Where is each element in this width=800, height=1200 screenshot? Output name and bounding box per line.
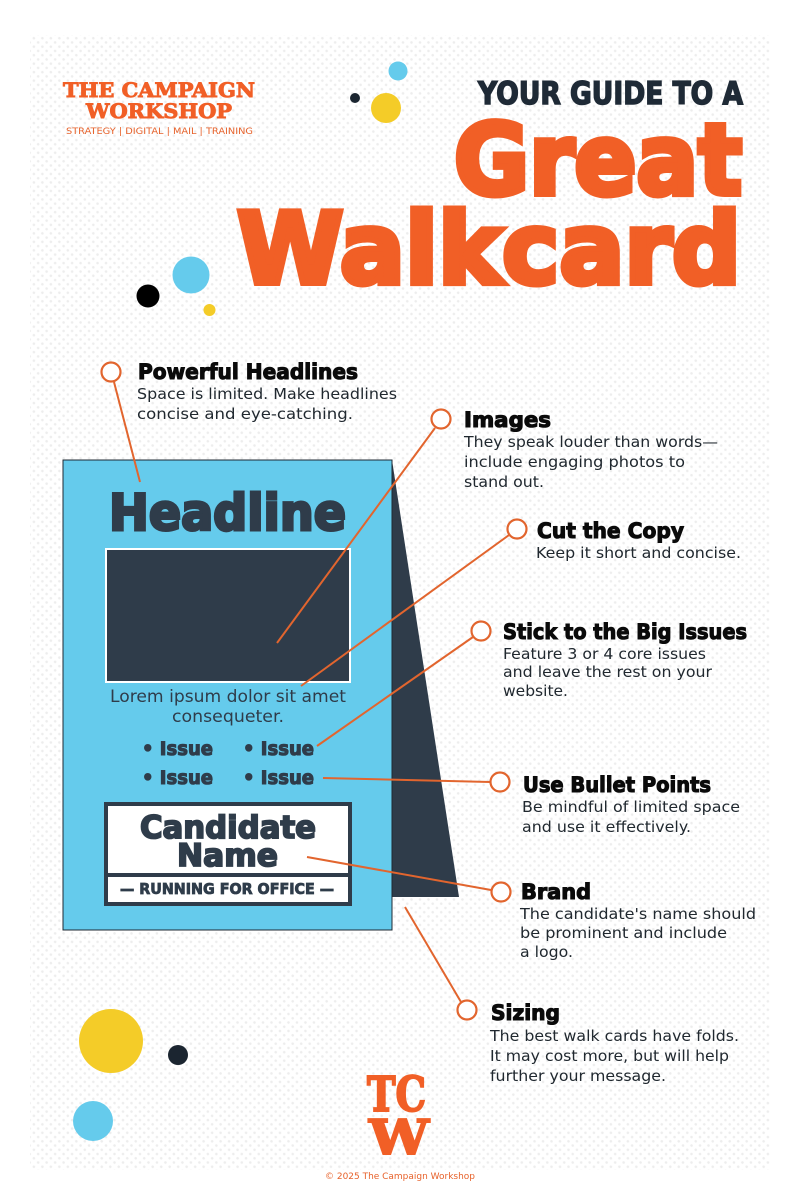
card issue bullets: • Issue bbox=[142, 767, 213, 789]
decorative dots: left bbox=[136, 256, 216, 316]
callout: Cut the Copy: Cut the Copy bbox=[537, 519, 684, 543]
decorative dots: bottom left bbox=[73, 1009, 188, 1141]
card body text bbox=[110, 687, 346, 727]
title: YOUR GUIDE TO A bbox=[477, 76, 743, 112]
callout: Powerful Headlines: Powerful Headlines bbox=[138, 360, 358, 384]
callout: Stick to the Big Issues bbox=[317, 620, 747, 746]
copyright footer: © 2025 The Campaign Workshop bbox=[325, 1172, 475, 1182]
title: Great bbox=[454, 104, 742, 218]
callout: Use Bullet Points: Use Bullet Points bbox=[523, 773, 711, 797]
callout: Sizing: further your message. bbox=[490, 1067, 666, 1085]
card issue bullets: • Issue bbox=[243, 738, 314, 760]
candidate name box: — RUNNING FOR OFFICE — bbox=[120, 880, 334, 898]
callout: Images: Images bbox=[464, 408, 551, 432]
decorative dots: top bbox=[350, 62, 408, 123]
callout: Use Bullet Points: and use it effectively. bbox=[522, 818, 691, 836]
card body text: Lorem ipsum dolor sit amet bbox=[110, 687, 346, 707]
candidate name box: Candidate bbox=[140, 810, 316, 846]
logo: TCW mark: TC bbox=[367, 1067, 426, 1123]
logo: The Campaign Workshop: WORKSHOP bbox=[85, 99, 232, 123]
callout: Images: They speak louder than words— bbox=[463, 433, 718, 451]
logo: The Campaign Workshop: STRATEGY | DIGITAL | MAIL | TRAINING bbox=[66, 127, 253, 137]
walkcard front panel bbox=[63, 460, 392, 930]
candidate name box bbox=[106, 804, 350, 904]
title bbox=[237, 76, 743, 307]
callout: Cut the Copy bbox=[301, 519, 741, 686]
callout: Brand: be prominent and include bbox=[520, 924, 727, 942]
callout: Sizing: It may cost more, but will help bbox=[490, 1047, 729, 1065]
logo: TCW mark bbox=[367, 1067, 430, 1166]
callout: Cut the Copy: Keep it short and concise. bbox=[536, 544, 741, 562]
callout: Use Bullet Points bbox=[323, 772, 740, 836]
card issue bullets: • Issue bbox=[243, 767, 314, 789]
card body text: consequeter. bbox=[172, 707, 284, 727]
callout: Brand: a logo. bbox=[520, 943, 573, 961]
callout: Sizing: The best walk cards have folds. bbox=[489, 1027, 739, 1045]
card issue bullets bbox=[142, 738, 314, 789]
card image placeholder bbox=[106, 549, 350, 682]
callout: Sizing: Sizing bbox=[491, 1001, 560, 1025]
callout: Stick to the Big Issues: Feature 3 or 4 core issues bbox=[503, 645, 706, 663]
callout: Stick to the Big Issues: website. bbox=[503, 682, 568, 700]
callout: Brand: Brand bbox=[521, 880, 591, 904]
callout: Images: include engaging photos to bbox=[464, 453, 685, 471]
title: Walkcard bbox=[237, 193, 741, 307]
callout: Powerful Headlines bbox=[102, 360, 397, 482]
callout: Use Bullet Points: Be mindful of limited space bbox=[522, 798, 740, 816]
walkcard fold panel bbox=[392, 460, 459, 897]
card headline: Headline bbox=[109, 484, 346, 542]
callout: Powerful Headlines: concise and eye-catching. bbox=[137, 405, 353, 423]
logo: The Campaign Workshop bbox=[63, 78, 255, 137]
logo: The Campaign Workshop: THE CAMPAIGN bbox=[63, 78, 255, 102]
callout: Stick to the Big Issues: Stick to the Big Issues bbox=[503, 620, 747, 644]
callout: Images bbox=[277, 408, 718, 643]
callout: Images: stand out. bbox=[464, 473, 544, 491]
callout: Sizing bbox=[405, 907, 739, 1085]
callout: Brand: The candidate's name should bbox=[519, 905, 756, 923]
candidate name box: Name bbox=[177, 838, 278, 874]
callout: Stick to the Big Issues: and leave the rest on your bbox=[503, 663, 713, 681]
callout: Powerful Headlines: Space is limited. Make headlines bbox=[137, 385, 397, 403]
card issue bullets: • Issue bbox=[142, 738, 213, 760]
callout: Brand bbox=[307, 857, 756, 961]
logo: TCW mark: W bbox=[368, 1110, 430, 1166]
